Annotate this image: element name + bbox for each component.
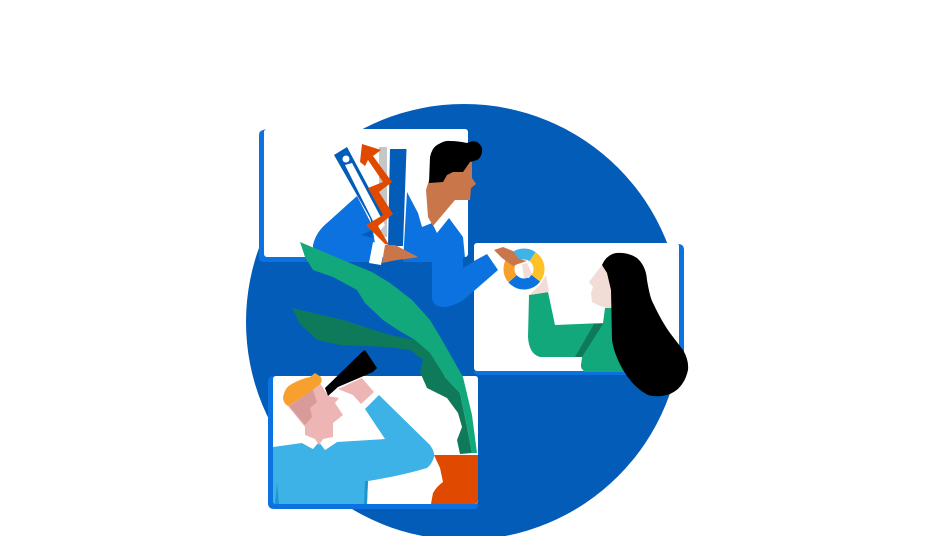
chart: donut held between figures xyxy=(503,248,545,290)
sleeve fold xyxy=(463,257,475,268)
shirt creases xyxy=(364,481,368,504)
head xyxy=(288,383,343,445)
chart: blue bar xyxy=(388,149,406,246)
ruler xyxy=(334,147,385,232)
long black hair xyxy=(602,253,688,396)
panel: top-left window xyxy=(259,129,468,262)
sleeve shadow xyxy=(575,324,603,357)
chart: grey bar xyxy=(379,147,387,237)
wrist and hand xyxy=(529,275,549,295)
shirt cuff xyxy=(369,242,385,265)
telescope xyxy=(325,350,377,396)
figure: man with chart xyxy=(313,141,498,307)
figure: woman with long hair xyxy=(528,253,688,396)
light leaf xyxy=(300,242,477,453)
hand xyxy=(338,378,374,404)
ear xyxy=(289,390,317,425)
collar xyxy=(302,437,315,449)
jacket fold xyxy=(361,230,373,238)
body: blue jacket xyxy=(313,192,498,307)
growth arrow xyxy=(360,144,393,245)
orange pot xyxy=(431,455,478,504)
sleeve and torso xyxy=(528,292,625,372)
panel: bottom-left window xyxy=(268,376,478,509)
blue shirt xyxy=(273,395,434,504)
hand xyxy=(382,245,418,263)
face xyxy=(426,160,476,226)
hand of man reaching to donut xyxy=(494,247,527,266)
figure: man with telescope xyxy=(273,350,434,504)
plant xyxy=(292,242,478,504)
face xyxy=(589,265,612,308)
dark leaf xyxy=(292,308,472,454)
panel: right window xyxy=(474,243,684,375)
orange hair xyxy=(283,373,322,406)
hair xyxy=(429,141,482,183)
background circle xyxy=(246,104,682,536)
